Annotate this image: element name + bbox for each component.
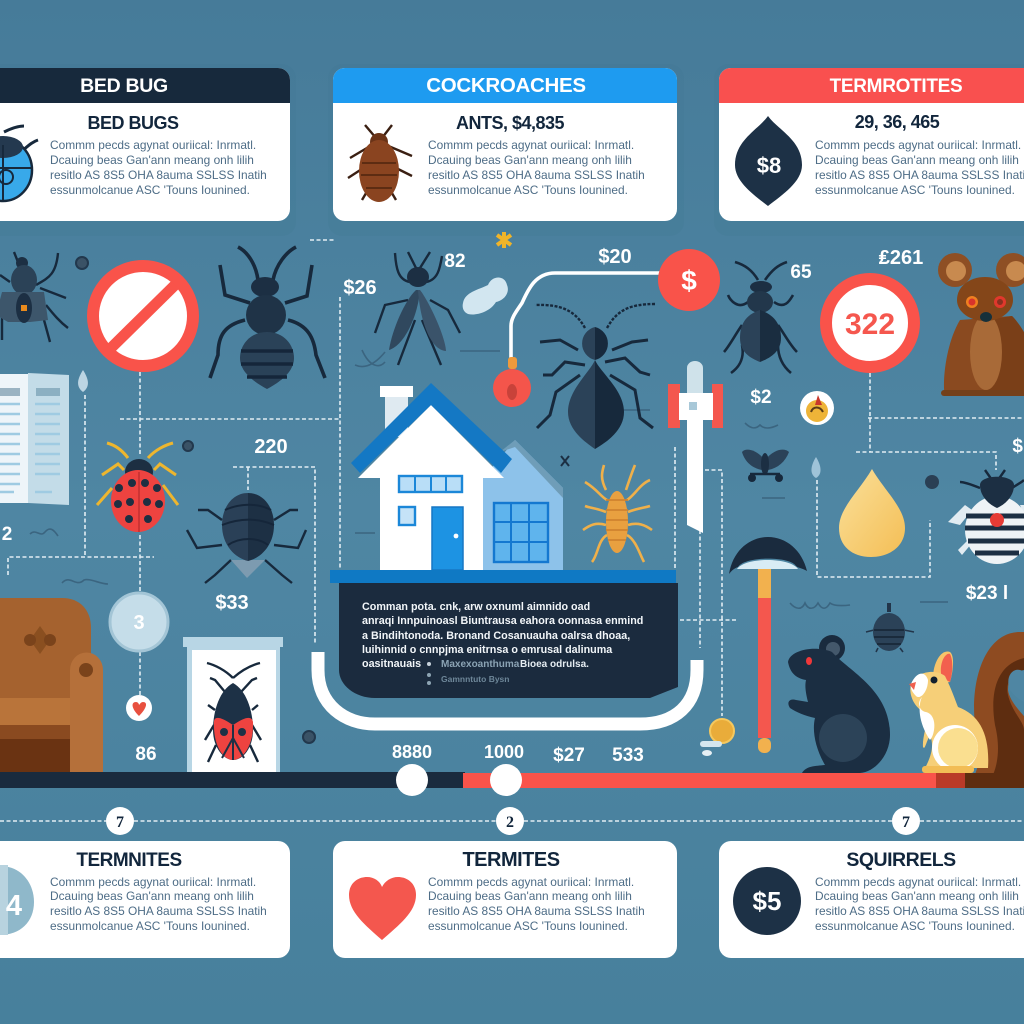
icon: large ant xyxy=(210,247,325,389)
icon: number 4 xyxy=(0,865,34,935)
icon: dollar shield: $8 xyxy=(757,153,781,178)
body text: resitlo AS 8S5 OHA 8auma SSLSS Inatih xyxy=(50,168,267,182)
body text: Dcauing beas Gan'ann meang onh lilih xyxy=(428,153,632,167)
body text: Commm pecds agynat ouriical: Inrmatl. xyxy=(815,138,1021,152)
icon: dark beetle upper right xyxy=(724,262,797,373)
header text: TERMROTITES xyxy=(830,76,962,97)
white pipe frame xyxy=(318,652,697,724)
label: 2: 2 xyxy=(2,524,12,545)
icon: mallet xyxy=(729,537,807,753)
heading: BED BUGS xyxy=(87,113,179,133)
board list xyxy=(427,659,589,685)
panel body xyxy=(719,68,1024,221)
icon: black mouse xyxy=(788,635,890,773)
icon: prohibition sign xyxy=(93,266,193,366)
number badge 2: 2 xyxy=(506,814,514,831)
board text: anraqi Innpuinoasl Biuntrausa eahora oonnasa enmind xyxy=(362,615,643,627)
icon: red heart xyxy=(349,877,416,940)
icon: small heart marker xyxy=(126,695,152,721)
icon: dollar shield xyxy=(735,116,802,206)
board list: Maxexoanthuma xyxy=(441,659,520,670)
body text: Dcauing beas Gan'ann meang onh lilih xyxy=(428,889,632,903)
header text: BED BUG xyxy=(80,75,168,97)
body text xyxy=(428,875,645,933)
panel: squirrels xyxy=(719,841,1024,958)
heading: SQUIRRELS xyxy=(846,849,956,871)
tiny marks xyxy=(30,350,948,608)
icon: cloud xyxy=(463,278,508,314)
board text: Comman pota. cnk, arw oxnuml aimnido oad xyxy=(362,601,590,613)
panel: termites bottom left xyxy=(0,841,290,958)
timeline labels xyxy=(392,742,644,766)
body text: Commm pecds agynat ouriical: Inrmatl. xyxy=(815,875,1021,889)
timeline labels: 1000 xyxy=(484,742,524,762)
icon: honey drop xyxy=(839,469,905,557)
panel: termites bottom center xyxy=(333,841,677,958)
icon: tiny spider xyxy=(303,731,315,743)
label: 261: ₤261 xyxy=(879,247,923,269)
number badge 1: 7 xyxy=(116,814,124,831)
label: 86: 86 xyxy=(135,744,157,765)
board text xyxy=(362,601,643,670)
panel body xyxy=(0,68,290,221)
label: $23: $23 l xyxy=(966,583,1008,604)
body text: Dcauing beas Gan'ann meang onh lilih xyxy=(50,153,254,167)
body text xyxy=(428,138,645,197)
panel header bar xyxy=(333,68,677,103)
icon: dark bedbug xyxy=(187,493,306,583)
number badge 2 xyxy=(496,807,524,835)
body text: essunmolcanue ASC 'Touns Iounined. xyxy=(428,183,628,197)
icon: yellow coin xyxy=(800,391,834,425)
body text xyxy=(50,138,267,197)
icon: armchair xyxy=(0,598,103,772)
icon: yellow spark xyxy=(497,232,511,248)
body text: essunmolcanue ASC 'Touns Iounined. xyxy=(815,919,1015,933)
label: $2: $2 xyxy=(750,387,772,408)
label: 65: 65 xyxy=(790,262,812,283)
panel: cockroaches xyxy=(333,68,677,221)
timeline bar xyxy=(0,742,1024,796)
board text: luihinnid o cnnpjma enitrnsa o emrusal dalinuma xyxy=(362,644,613,656)
label: $20: $20 xyxy=(598,246,632,268)
icon: red bulb xyxy=(493,357,531,407)
icon: small bug xyxy=(76,257,88,269)
timeline node 1 xyxy=(396,764,428,796)
body text: Dcauing beas Gan'ann meang onh lilih xyxy=(50,889,254,903)
icon: mosquito xyxy=(375,252,460,365)
icon: fly xyxy=(0,252,68,342)
panel: dark info board xyxy=(330,570,678,698)
panel: termites xyxy=(719,68,1024,221)
body text: essunmolcanue ASC 'Touns Iounined. xyxy=(50,183,250,197)
icon: big dark ant xyxy=(535,304,655,449)
timeline labels: 8880 xyxy=(392,742,432,762)
dashed connector lines xyxy=(0,240,1024,821)
icon: house xyxy=(351,383,563,570)
icon: number 3 badge xyxy=(110,593,168,651)
body text xyxy=(815,138,1024,197)
icon: yellow coins xyxy=(700,719,734,756)
icon: small dark bug xyxy=(925,475,939,489)
timeline labels: 533 xyxy=(612,745,644,766)
number badge 3: 7 xyxy=(902,814,910,831)
body text: essunmolcanue ASC 'Touns Iounined. xyxy=(815,183,1015,197)
icon: brown rodent xyxy=(938,253,1024,396)
body text: essunmolcanue ASC 'Touns Iounined. xyxy=(50,919,250,933)
icon: dark moth xyxy=(742,450,789,482)
icon: number 4: 4 xyxy=(6,890,22,922)
stat circle 322: 322 xyxy=(845,308,895,341)
panel body xyxy=(333,68,677,221)
board list: Gamnntuto Bysn xyxy=(441,674,509,684)
icon: dollar badge xyxy=(733,867,801,935)
body text: Dcauing beas Gan'ann meang onh lilih xyxy=(815,153,1019,167)
board list: Bioea odrulsa. xyxy=(520,659,589,670)
icon: small drop xyxy=(78,370,88,392)
panel: bed bug xyxy=(0,68,290,221)
number badge 3 xyxy=(892,807,920,835)
icon: dark small beetle xyxy=(866,603,914,652)
label: 220: 220 xyxy=(254,436,288,458)
icon: yellow silverfish xyxy=(583,465,652,562)
body text: Dcauing beas Gan'ann meang onh lilih xyxy=(815,889,1019,903)
icon: number 3 badge: 3 xyxy=(133,612,145,634)
body text xyxy=(50,875,267,933)
body text: Commm pecds agynat ouriical: Inrmatl. xyxy=(50,875,256,889)
label: 82: 82 xyxy=(444,251,466,272)
label: $26: $26 xyxy=(343,277,377,299)
icon: dollar badge: $5 xyxy=(753,886,781,916)
heading: TERMNITES xyxy=(76,850,182,871)
heading: TERMITES xyxy=(462,849,560,871)
board text: a Bindihtonoda. Bronand Cosanuauha oalrsa dhoaa, xyxy=(362,630,630,642)
icon: blue beetle xyxy=(0,126,38,201)
body text xyxy=(815,875,1024,933)
icon: striped bug xyxy=(948,470,1024,564)
timeline node 2 xyxy=(490,764,522,796)
dollar pin with pipe xyxy=(493,249,720,407)
number badge 1 xyxy=(106,807,134,835)
body text: resitlo AS 8S5 OHA 8auma SSLSS Inatih xyxy=(428,168,645,182)
header text: COCKROACHES xyxy=(426,74,586,97)
blue top bar xyxy=(330,570,676,583)
body text: Commm pecds agynat ouriical: Inrmatl. xyxy=(428,138,634,152)
icon: dollar circle: $ xyxy=(681,265,697,296)
icon: open document xyxy=(0,373,69,505)
body text: resitlo AS 8S5 OHA 8auma SSLSS Inatih xyxy=(50,904,267,918)
heading: ANTS, $4,835 xyxy=(456,113,565,133)
icon: dollar circle xyxy=(658,249,720,311)
body text: Commm pecds agynat ouriical: Inrmatl. xyxy=(428,875,634,889)
icon: white spray tool xyxy=(668,361,723,533)
label: $33: $33 xyxy=(215,592,249,614)
icon: brown cockroach xyxy=(348,125,412,202)
heading: 29, 36, 465 xyxy=(855,112,940,132)
panel header bar xyxy=(0,68,290,103)
icon: tiny bug xyxy=(183,441,193,451)
icon: small droplet xyxy=(811,457,821,478)
timeline labels: $27 xyxy=(553,745,585,766)
icon: ladybug xyxy=(97,443,178,532)
body text: Commm pecds agynat ouriical: Inrmatl. xyxy=(50,138,256,152)
body text: resitlo AS 8S5 OHA 8auma SSLSS Inatih xyxy=(428,904,645,918)
board body xyxy=(339,583,678,698)
panel header bar xyxy=(719,68,1024,103)
stat circle 322 xyxy=(826,279,914,367)
body text: essunmolcanue ASC 'Touns Iounined. xyxy=(428,919,628,933)
board text: oasitnauais xyxy=(362,658,421,670)
icon: framed bug poster xyxy=(183,637,283,772)
icon: rabbit and squirrel tail xyxy=(909,632,1024,788)
